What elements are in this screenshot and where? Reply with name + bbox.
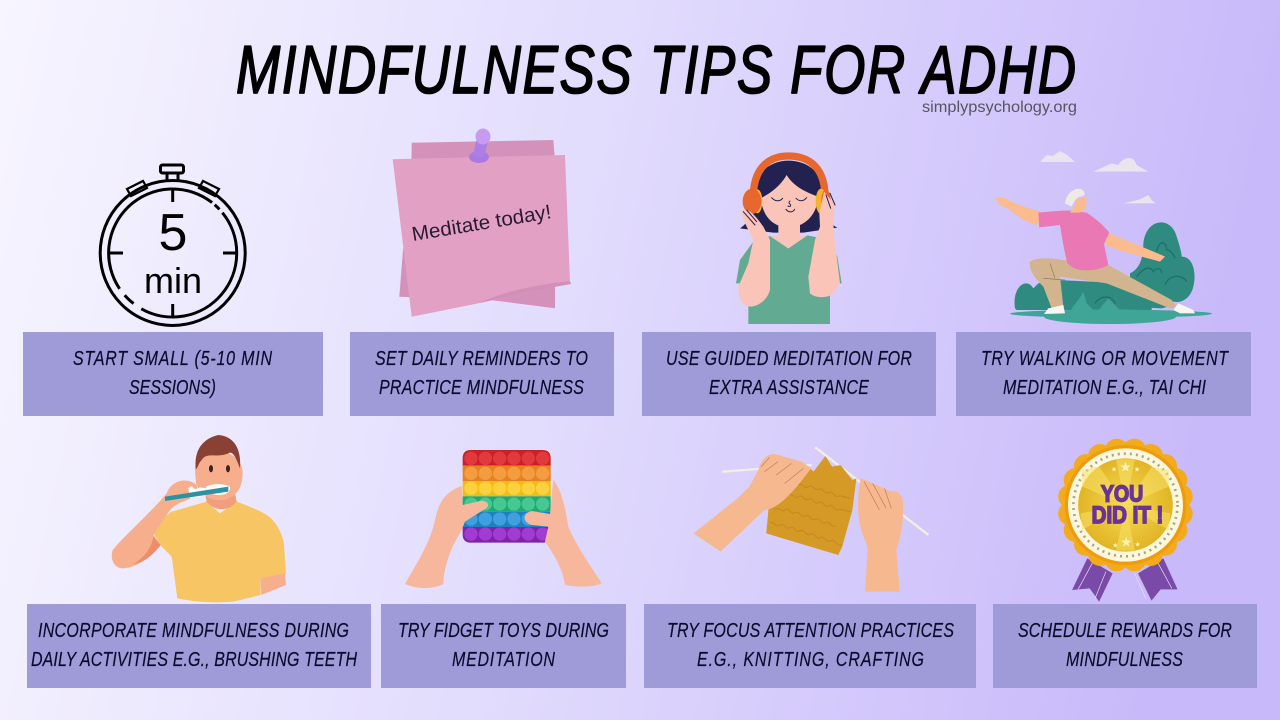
label: daily reminders: SET DAILY REMINDERS TO (375, 347, 588, 369)
label: rewards (993, 604, 1257, 688)
title: MINDFULNESS TIPS FOR ADHD (236, 32, 1076, 107)
label: guided meditation: USE GUIDED MEDITATION FOR (666, 347, 912, 369)
icon: hands holding pop-it fidget toy (405, 450, 602, 588)
label: guided meditation (642, 332, 936, 416)
label: fidget toys: TRY FIDGET TOYS DURING (398, 619, 609, 641)
icon: you did it rosette badge: YOU (1101, 480, 1143, 506)
label: fidget toys (381, 604, 626, 688)
label: movement meditation: TRY WALKING OR MOVEMENT (981, 347, 1230, 369)
icon: person doing tai chi (995, 151, 1212, 324)
icon: hands knitting (694, 447, 928, 592)
label: focus attention: TRY FOCUS ATTENTION PRACTICES (667, 619, 954, 641)
icon: 5 minute stopwatch: 5 (159, 204, 187, 262)
label: daily activities: INCORPORATE MINDFULNESS DURING (38, 619, 349, 641)
panel: daily activities (27, 435, 371, 688)
label: movement meditation (956, 332, 1251, 416)
icon: 5 minute stopwatch (100, 165, 245, 326)
icon: sticky note with pin (393, 128, 571, 317)
label: fidget toys: MEDITATION (452, 648, 556, 670)
icon: woman with headphones (736, 156, 842, 324)
label: daily activities: DAILY ACTIVITIES E.G., BRUSHING TEETH (31, 648, 358, 670)
icon: you did it rosette badge (1058, 439, 1193, 602)
label: start small (23, 332, 323, 416)
source credit: simplypsychology.org (922, 99, 1077, 116)
label: start small: SESSIONS) (129, 376, 216, 398)
label: daily reminders (350, 332, 614, 416)
panel: guided meditation (642, 156, 936, 416)
icon: you did it rosette badge: ★ (1111, 466, 1117, 474)
icon: you did it rosette badge: ★ (1135, 541, 1141, 549)
label: focus attention: E.G., KNITTING, CRAFTING (697, 648, 924, 670)
panel: fidget toys (381, 450, 626, 688)
icon: you did it rosette badge: ★ (1119, 461, 1132, 476)
icon: you did it rosette badge: ★ (1120, 536, 1132, 551)
panel: rewards (993, 439, 1257, 688)
label: focus attention (644, 604, 976, 688)
icon: man brushing teeth (112, 435, 286, 602)
icon: you did it rosette badge: ★ (1112, 541, 1118, 549)
icon: 5 minute stopwatch: min (144, 260, 202, 301)
label: daily activities (27, 604, 371, 688)
icon: you did it rosette badge: ★ (1134, 466, 1140, 474)
label: movement meditation: MEDITATION E.G., TAI CHI (1003, 376, 1206, 398)
label: rewards: SCHEDULE REWARDS FOR (1018, 619, 1232, 641)
panel: movement meditation (956, 151, 1251, 416)
panel: start small (23, 165, 323, 416)
label: guided meditation: EXTRA ASSISTANCE (709, 376, 870, 398)
label: daily reminders: PRACTICE MINDFULNESS (379, 376, 584, 398)
label: start small: START SMALL (5-10 MIN (73, 347, 273, 369)
icon: you did it rosette badge: DID IT ! (1092, 502, 1163, 529)
label: rewards: MINDFULNESS (1066, 648, 1183, 670)
panel: focus attention (644, 447, 976, 688)
icon: sticky note with pin: Meditate today! (410, 201, 553, 246)
panel: daily reminders (350, 128, 614, 416)
